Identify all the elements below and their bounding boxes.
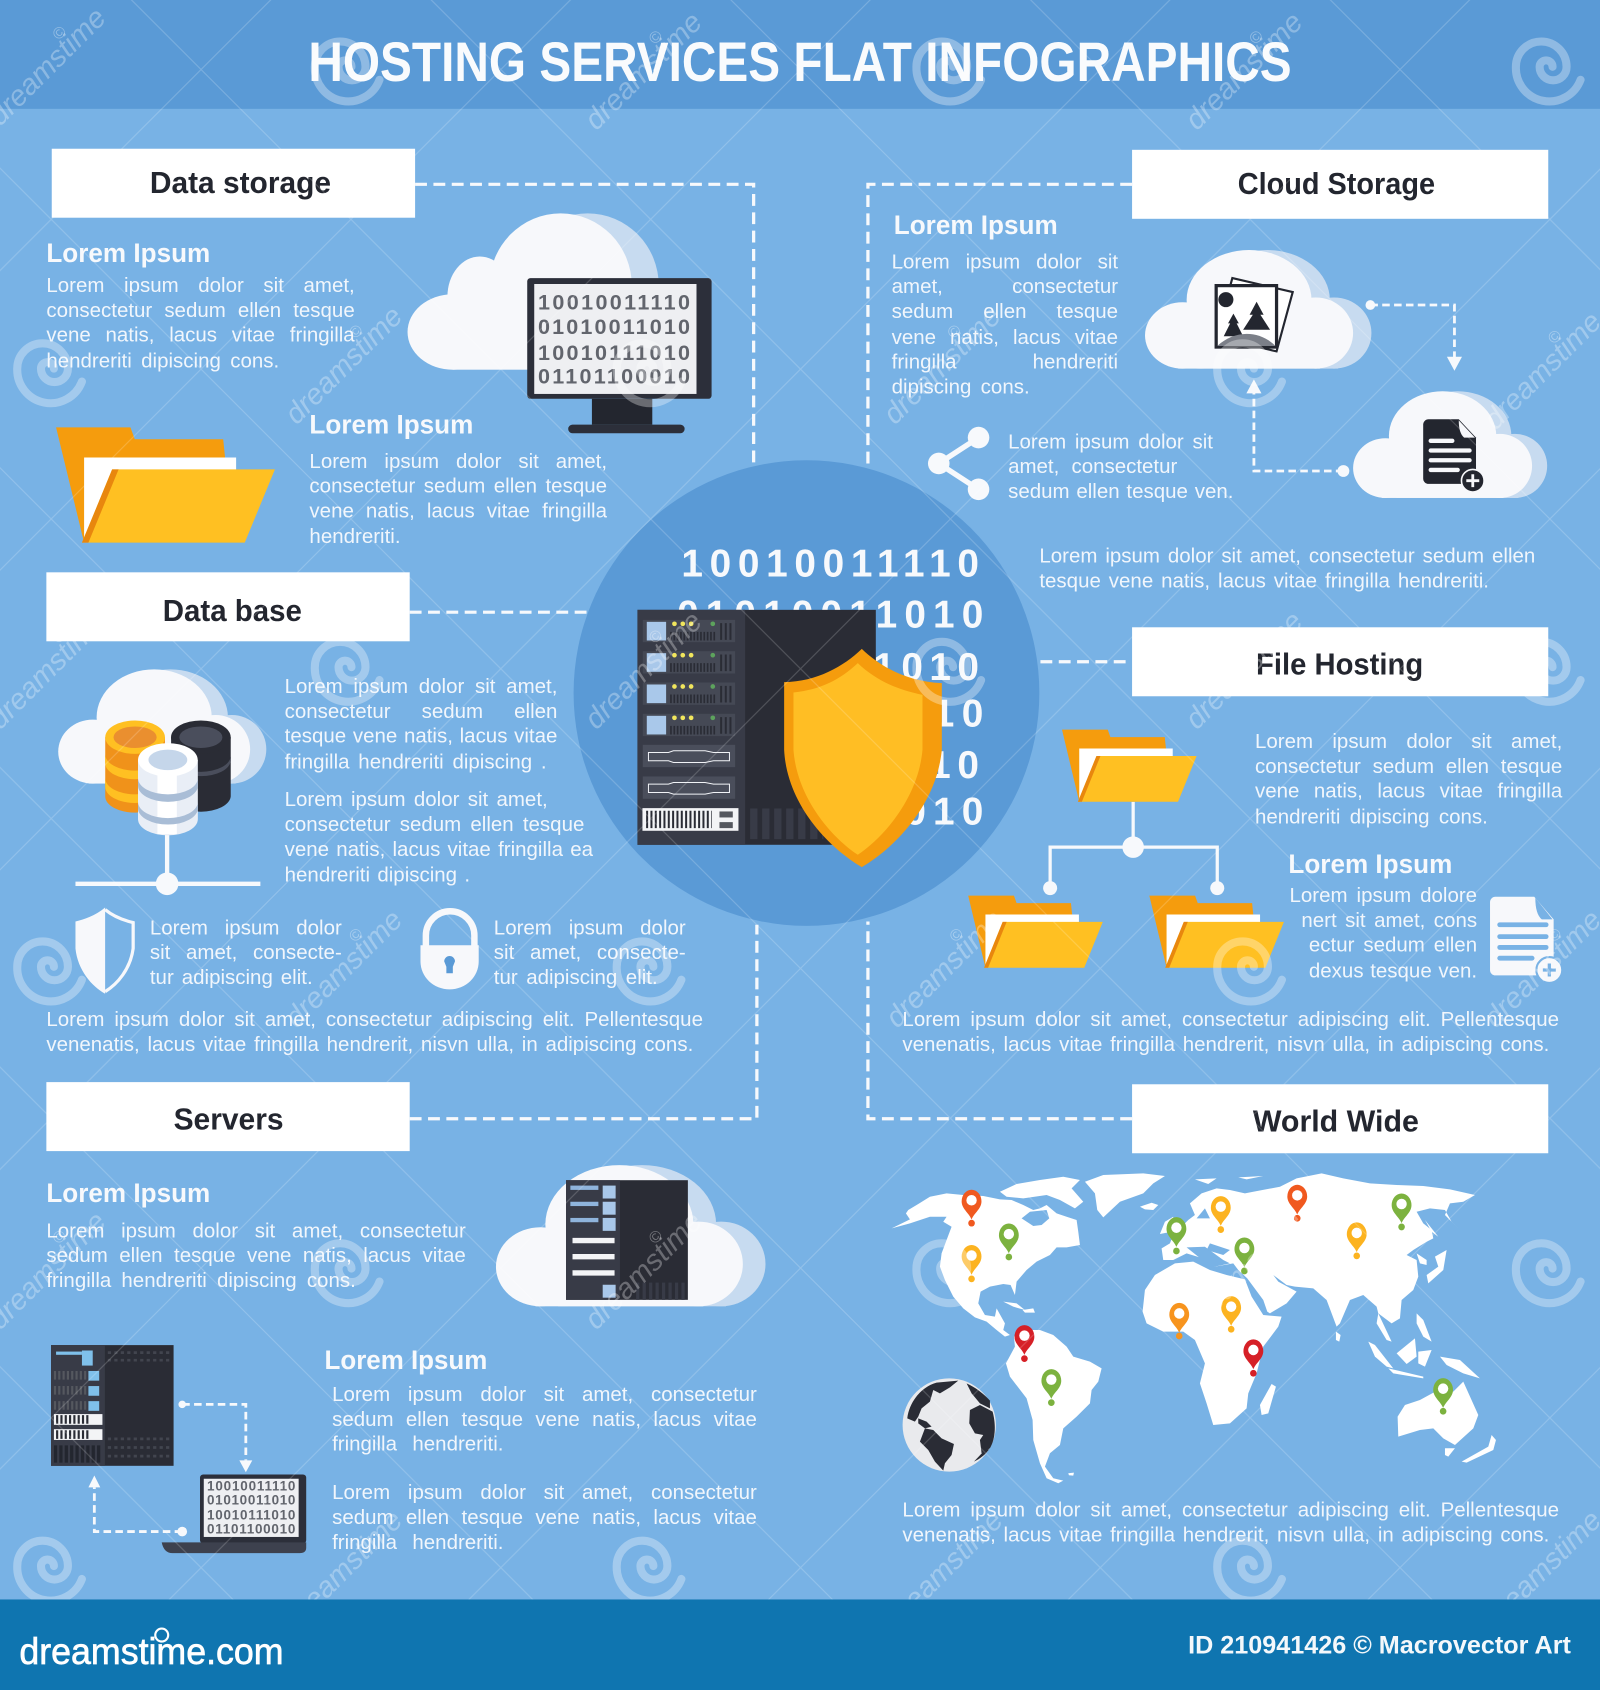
connector: world wide xyxy=(868,922,1132,1119)
text block: sit amet, consecte- xyxy=(150,942,342,965)
heading: data base: Data base xyxy=(163,595,302,628)
server rack xyxy=(637,610,876,845)
heading: file hosting: File Hosting xyxy=(1256,649,1423,682)
text block: ectur sedum ellen xyxy=(1309,935,1477,958)
heading: cloud storage: Cloud Storage xyxy=(1238,168,1435,201)
text block: Lorem ipsum dolor sit amet, consectetur xyxy=(46,1220,466,1243)
text block: sedum ellen tesque ven. xyxy=(1008,481,1233,504)
watermark text: © xyxy=(645,27,666,48)
subheading: Lorem Ipsum xyxy=(46,238,210,268)
map: eurasia, africa and oceania xyxy=(1143,1173,1496,1463)
subheading: Lorem Ipsum xyxy=(1288,849,1452,879)
text block: Lorem ipsum dolor sit amet, consectetur adipiscing elit. Pellentesque xyxy=(46,1009,703,1031)
text block: venenatis, lacus vitae fringilla hendrerit, nisvn ulla, in adipiscing cons. xyxy=(46,1034,693,1056)
heading: servers xyxy=(46,1082,410,1151)
heading: data storage xyxy=(52,149,415,218)
subheading: Lorem Ipsum xyxy=(894,210,1058,240)
icon: folder tree xyxy=(968,730,1284,968)
watermark text: dreamstime xyxy=(279,1504,409,1634)
text block: hendreriti. xyxy=(309,526,401,548)
text block xyxy=(309,449,622,553)
arrow: bottom cloud to top cloud xyxy=(1246,379,1349,477)
watermark text: dreamstime xyxy=(880,1504,1010,1634)
text block: Lorem ipsum dolor xyxy=(150,917,342,940)
icon: cloud with document xyxy=(1353,391,1547,498)
binary digits: 01010011010 xyxy=(677,791,983,834)
text block xyxy=(332,1481,774,1559)
text block: Lorem ipsum dolor sit xyxy=(892,251,1118,274)
panel: servers xyxy=(46,1082,774,1559)
text block: Lorem ipsum dolor sit amet, xyxy=(285,676,557,698)
watermark text: dreamstime xyxy=(1179,1206,1309,1336)
central circle with server and shield xyxy=(574,460,1039,926)
watermark text: © xyxy=(645,1226,666,1248)
text block: tur adipiscing elit. xyxy=(150,967,313,990)
text block xyxy=(494,916,704,994)
watermark text: © xyxy=(645,626,666,647)
arrow: server to laptop xyxy=(178,1401,252,1472)
icon: document with plus xyxy=(1490,897,1562,983)
text block: venenatis, lacus vitae fringilla hendrerit, nisvn ulla, in adipiscing cons. xyxy=(902,1034,1549,1056)
text block xyxy=(285,675,576,778)
text block: Lorem ipsum dolor xyxy=(494,917,686,940)
icon: cloud with monitor xyxy=(408,213,712,433)
binary digits: 10010111010 xyxy=(681,646,979,689)
arrow: top cloud to bottom cloud xyxy=(1365,300,1462,371)
icon: open folder xyxy=(56,427,275,543)
icon: padlock xyxy=(420,911,479,989)
text block: Lorem ipsum dolor sit xyxy=(1008,431,1213,454)
icon: cloud with databases xyxy=(58,669,266,895)
text block: Lorem ipsum dolore xyxy=(1289,885,1477,908)
text block: hendreriti dipiscing cons. xyxy=(1255,806,1488,828)
heading: cloud storage xyxy=(1132,150,1548,219)
subheading: Lorem Ipsum xyxy=(325,1345,487,1375)
text block: nert sit amet, cons xyxy=(1301,910,1477,933)
watermark text: dreamstime xyxy=(579,605,709,736)
text block: amet, consectetur xyxy=(892,276,1118,299)
icon: shield xyxy=(75,908,133,994)
text block xyxy=(902,1008,1582,1062)
icon: cloud with monitor: 10010111010 xyxy=(538,340,690,365)
text block: consectetur sedum ellen tesque xyxy=(285,814,584,837)
title banner xyxy=(0,0,1600,109)
watermark text: © xyxy=(49,23,70,44)
text block xyxy=(46,1008,720,1062)
watermark text: © xyxy=(1544,326,1566,348)
text block xyxy=(46,1219,478,1297)
text block: fringilla hendreriti. xyxy=(332,1434,504,1457)
watermark text: dreamstime xyxy=(1179,605,1309,736)
panel: cloud storage xyxy=(892,150,1557,598)
binary digits: 10010011110 xyxy=(681,744,979,787)
text block xyxy=(902,1498,1582,1552)
icon: cloud with monitor: 10010011110 xyxy=(538,289,690,314)
heading: world wide xyxy=(1132,1084,1548,1153)
connector: cloud storage xyxy=(868,184,1132,466)
security shield xyxy=(784,649,942,867)
watermark text: dreamstime xyxy=(279,904,409,1034)
text block: consectetur sedum ellen tesque xyxy=(1255,756,1562,778)
watermark text: © xyxy=(345,925,367,946)
heading: data base xyxy=(46,572,410,641)
panel: data storage xyxy=(46,149,712,553)
text block: venenatis, lacus vitae fringilla hendrerit, nisvn ulla, in adipiscing cons. xyxy=(902,1524,1549,1547)
icon: laptop: 10010011110 xyxy=(207,1479,295,1494)
text block xyxy=(150,916,360,994)
text block: vene natis, lacus vitae fringilla xyxy=(46,325,355,347)
text block: tesque vene natis, lacus vitae xyxy=(285,726,557,748)
text block xyxy=(1039,544,1557,598)
heading: servers: Servers xyxy=(174,1104,284,1137)
text block xyxy=(1255,730,1578,833)
text block: hendreriti dipiscing . xyxy=(285,864,470,887)
icon: globe xyxy=(903,1378,996,1472)
text block: dexus tesque ven. xyxy=(1309,960,1477,983)
text block: sedum ellen tesque vene natis, lacus vitae xyxy=(332,1507,757,1530)
footer bar xyxy=(0,1599,1600,1690)
text block: consectetur sedum ellen tesque xyxy=(309,476,607,498)
text block: vene natis, lacus vitae fringilla xyxy=(309,501,607,523)
panel: file hosting xyxy=(902,627,1582,1062)
connector: file hosting xyxy=(1040,660,1132,663)
watermark text: © xyxy=(49,1226,70,1248)
watermark text: © xyxy=(49,626,70,647)
icon: laptop: 10010111010 xyxy=(207,1508,295,1523)
text block xyxy=(46,274,370,377)
text block: Lorem ipsum dolor sit amet, xyxy=(46,275,355,297)
binary digits: 01010011010 xyxy=(677,593,983,636)
connector: data storage xyxy=(415,184,754,463)
heading: data storage: Data storage xyxy=(150,167,331,200)
text block: dipiscing cons. xyxy=(892,376,1030,399)
text block: Lorem ipsum dolor sit amet, consectetur xyxy=(332,1482,757,1505)
connector: servers xyxy=(410,925,757,1119)
icon: cloud with server xyxy=(496,1165,765,1306)
icon: server rack xyxy=(51,1345,174,1466)
watermark text: dreamstime xyxy=(877,300,1007,431)
text block: vene natis, lacus vitae fringilla ea xyxy=(285,839,593,862)
icon: laptop: 01010011010 xyxy=(207,1493,295,1508)
icon: cloud with monitor: 01101100010 xyxy=(538,364,690,389)
text block: Lorem ipsum dolor sit amet, xyxy=(285,789,548,812)
panel: data base xyxy=(46,572,720,1062)
watermark text: dreamstime xyxy=(279,300,409,431)
title banner: HOSTING SERVICES FLAT INFOGRAPHICS xyxy=(308,30,1292,93)
subheading: Lorem Ipsum xyxy=(46,1178,210,1208)
footer logo: dreamstime.com xyxy=(19,1631,284,1672)
text block: sedum ellen tesque xyxy=(892,301,1118,324)
map pins xyxy=(962,1185,1453,1415)
binary digits: 01101100010 xyxy=(677,692,983,735)
text block: consectetur sedum ellen tesque xyxy=(46,300,355,322)
heading: world wide: World Wide xyxy=(1253,1106,1419,1139)
watermark text: © xyxy=(946,925,967,946)
text block: Lorem ipsum dolor sit amet, xyxy=(1255,731,1562,753)
text block: consectetur sedum ellen xyxy=(285,701,557,723)
text block: Lorem ipsum dolor sit amet, xyxy=(309,451,607,473)
watermark text: dreamstime xyxy=(1179,6,1309,136)
watermark text: © xyxy=(1544,925,1566,946)
icon: cloud with monitor: 01010011010 xyxy=(538,314,690,339)
text block: Lorem ipsum dolor sit amet, consectetur adipiscing elit. Pellentesque xyxy=(902,1499,1559,1522)
arrow: laptop to server xyxy=(88,1476,187,1536)
watermark text: dreamstime xyxy=(579,6,709,136)
world map xyxy=(892,1173,1496,1483)
text block: tur adipiscing elit. xyxy=(494,967,658,990)
map: americas and greenland xyxy=(892,1173,1165,1483)
text block xyxy=(285,788,608,891)
icon: laptop xyxy=(162,1474,306,1553)
text block xyxy=(332,1383,774,1460)
watermark text: dreamstime xyxy=(880,904,1010,1034)
text block: hendreriti dipiscing cons. xyxy=(46,350,279,372)
text block: tesque vene natis, lacus vitae fringilla hendreriti. xyxy=(1039,570,1489,593)
watermark text: © xyxy=(1246,1226,1267,1248)
icon: laptop: 01101100010 xyxy=(207,1522,295,1537)
watermark text: © xyxy=(1246,626,1267,647)
text block xyxy=(892,250,1134,403)
panel: world wide xyxy=(892,1084,1582,1552)
text block: sedum ellen tesque vene natis, lacus vitae xyxy=(46,1245,466,1268)
binary digits xyxy=(677,543,983,834)
text block: Lorem ipsum dolor sit amet, consectetur adipiscing elit. Pellentesque xyxy=(902,1009,1559,1031)
image credit: ID 210941426 © Macrovector Art xyxy=(1188,1632,1571,1659)
text block: Lorem ipsum dolor sit amet, consectetur sedum ellen xyxy=(1039,545,1535,568)
watermark text: dreamstime xyxy=(579,1206,709,1336)
connector: data base xyxy=(410,611,588,614)
icon: share xyxy=(928,427,989,500)
watermark text: © xyxy=(345,321,367,342)
text block: fringilla hendreriti dipiscing . xyxy=(285,751,547,773)
icon: cloud with photos xyxy=(1145,250,1371,369)
text block: vene natis, lacus vitae fringilla xyxy=(1255,781,1562,803)
text block: fringilla hendreriti dipiscing cons. xyxy=(46,1270,356,1293)
text block xyxy=(1008,430,1251,510)
text block: fringilla hendreriti. xyxy=(332,1532,504,1555)
subheading: Lorem Ipsum xyxy=(309,409,473,439)
watermark text: © xyxy=(944,321,965,342)
text block: sedum ellen tesque vene natis, lacus vitae xyxy=(332,1409,757,1432)
text block: sit amet, consecte- xyxy=(494,942,686,965)
text block: fringilla hendreriti xyxy=(892,351,1118,374)
text block: Lorem ipsum dolor sit amet, consectetur xyxy=(332,1384,757,1407)
binary digits: 10010011110 xyxy=(681,543,979,586)
text block xyxy=(1283,884,1482,987)
text block: amet, consectetur xyxy=(1008,456,1177,479)
heading: file hosting xyxy=(1132,627,1548,696)
watermark text: © xyxy=(1246,27,1267,48)
text block: vene natis, lacus vitae xyxy=(892,326,1118,349)
